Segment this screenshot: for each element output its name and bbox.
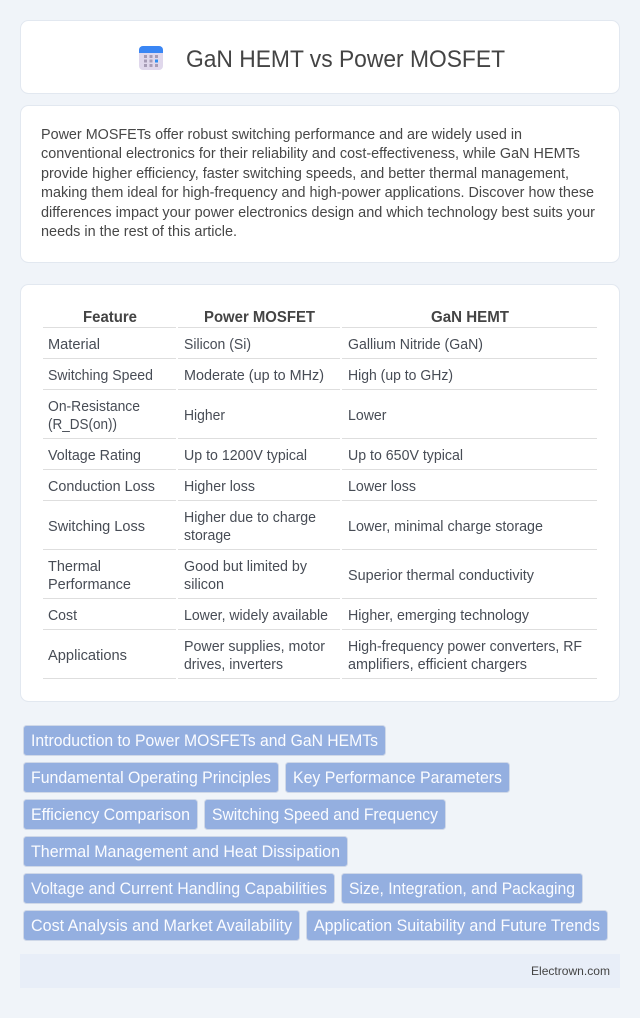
row: thermal performance: Thermal bbox=[48, 559, 101, 575]
row: applications bbox=[48, 639, 582, 673]
row: on-resistance: On-Resistance bbox=[48, 399, 140, 415]
row: switching loss: storage bbox=[184, 528, 231, 544]
table header row: Power MOSFET bbox=[204, 309, 315, 326]
row: applications: amplifiers, efficient chargers bbox=[348, 657, 527, 673]
text block: introduction paragraph bbox=[41, 127, 595, 240]
footer: Electrown.com bbox=[531, 964, 610, 978]
row: conduction loss: Higher loss bbox=[184, 479, 255, 495]
tag bbox=[24, 800, 198, 830]
table header row: Feature bbox=[83, 309, 137, 326]
row: applications: Applications bbox=[48, 648, 127, 664]
row: switching speed: Moderate (up to MHz) bbox=[184, 368, 324, 384]
row: applications: High-frequency power converters, RF bbox=[348, 639, 582, 655]
tag: Cost Analysis and Market Availability bbox=[31, 917, 293, 935]
row: switching loss: Higher due to charge bbox=[184, 510, 316, 526]
tag list: article sections bbox=[24, 726, 608, 940]
row: voltage rating: Up to 1200V typical bbox=[184, 448, 307, 464]
row: voltage rating: Voltage Rating bbox=[48, 448, 141, 464]
tag bbox=[24, 874, 334, 904]
tag: Switching Speed and Frequency bbox=[212, 806, 439, 824]
tag bbox=[306, 910, 608, 940]
table header row bbox=[83, 309, 509, 326]
text block: introduction paragraph: making them ideal for high-frequency and high-power applications. Discover how these bbox=[41, 185, 594, 201]
row: material: Silicon (Si) bbox=[184, 337, 251, 353]
row: thermal performance: Performance bbox=[48, 577, 131, 593]
table header row: GaN HEMT bbox=[431, 309, 509, 326]
text block: introduction paragraph: needs in the rest of this article. bbox=[41, 224, 237, 240]
row: thermal performance bbox=[48, 559, 535, 593]
tag bbox=[342, 874, 582, 904]
panel: header bbox=[20, 20, 620, 94]
row: material: Gallium Nitride (GaN) bbox=[348, 337, 483, 353]
row: on-resistance: (R_DS(on)) bbox=[48, 417, 117, 433]
row: conduction loss: Conduction Loss bbox=[48, 479, 155, 495]
row: on-resistance: Lower bbox=[348, 408, 387, 424]
tag bbox=[24, 726, 386, 756]
row: conduction loss: Lower loss bbox=[348, 479, 416, 495]
row: on-resistance: Higher bbox=[184, 408, 225, 424]
row: switching speed: Switching Speed bbox=[48, 368, 153, 384]
row: voltage rating bbox=[48, 448, 463, 464]
row: switching loss bbox=[48, 510, 543, 544]
tag bbox=[204, 800, 446, 830]
row: switching loss: Lower, minimal charge storage bbox=[348, 519, 543, 535]
icon: calendar bbox=[139, 46, 163, 70]
row: on-resistance bbox=[48, 399, 387, 433]
row: voltage rating: Up to 650V typical bbox=[348, 448, 463, 464]
text block: introduction paragraph: differences impact your power electronics design and which technology best suits your bbox=[41, 205, 595, 221]
row: applications: drives, inverters bbox=[184, 657, 283, 673]
row: cost: Lower, widely available bbox=[184, 608, 328, 624]
panel: comparison table bbox=[20, 284, 620, 702]
tag: Introduction to Power MOSFETs and GaN HEMTs bbox=[31, 732, 378, 750]
text block: introduction paragraph: conventional electronics for their reliability and cost-effectiveness, while GaN HEMTs bbox=[41, 146, 580, 162]
row: switching speed: High (up to GHz) bbox=[348, 368, 453, 384]
tag: Voltage and Current Handling Capabilities bbox=[31, 880, 327, 898]
title: GaN HEMT vs Power MOSFET bbox=[186, 46, 505, 73]
tag bbox=[286, 762, 510, 792]
row: thermal performance: silicon bbox=[184, 577, 224, 593]
text block: introduction paragraph: Power MOSFETs offer robust switching performance and are widely used in bbox=[41, 127, 522, 143]
row: cost bbox=[48, 608, 530, 624]
tag bbox=[24, 910, 300, 940]
tag bbox=[24, 762, 278, 792]
row: cost: Cost bbox=[48, 608, 77, 624]
tag: Thermal Management and Heat Dissipation bbox=[31, 843, 340, 861]
row: thermal performance: Good but limited by bbox=[184, 559, 308, 575]
row: material: Material bbox=[48, 337, 100, 353]
panel: introduction bbox=[20, 106, 620, 262]
footer bbox=[20, 954, 620, 988]
row: thermal performance: Superior thermal conductivity bbox=[348, 568, 535, 584]
row: switching loss: Switching Loss bbox=[48, 519, 145, 535]
row: cost: Higher, emerging technology bbox=[348, 608, 530, 624]
text block: introduction paragraph: provide higher efficiency, faster switching speeds, and better thermal management, bbox=[41, 166, 569, 182]
row: switching speed bbox=[48, 368, 453, 384]
tag bbox=[24, 836, 348, 866]
tag: Efficiency Comparison bbox=[31, 806, 190, 824]
row: material bbox=[48, 337, 483, 353]
tag: Key Performance Parameters bbox=[293, 769, 502, 787]
row: applications: Power supplies, motor bbox=[184, 639, 325, 655]
tag: Application Suitability and Future Trends bbox=[314, 917, 600, 935]
tag: Fundamental Operating Principles bbox=[31, 769, 271, 787]
tag: Size, Integration, and Packaging bbox=[349, 880, 575, 898]
row: conduction loss bbox=[48, 479, 416, 495]
